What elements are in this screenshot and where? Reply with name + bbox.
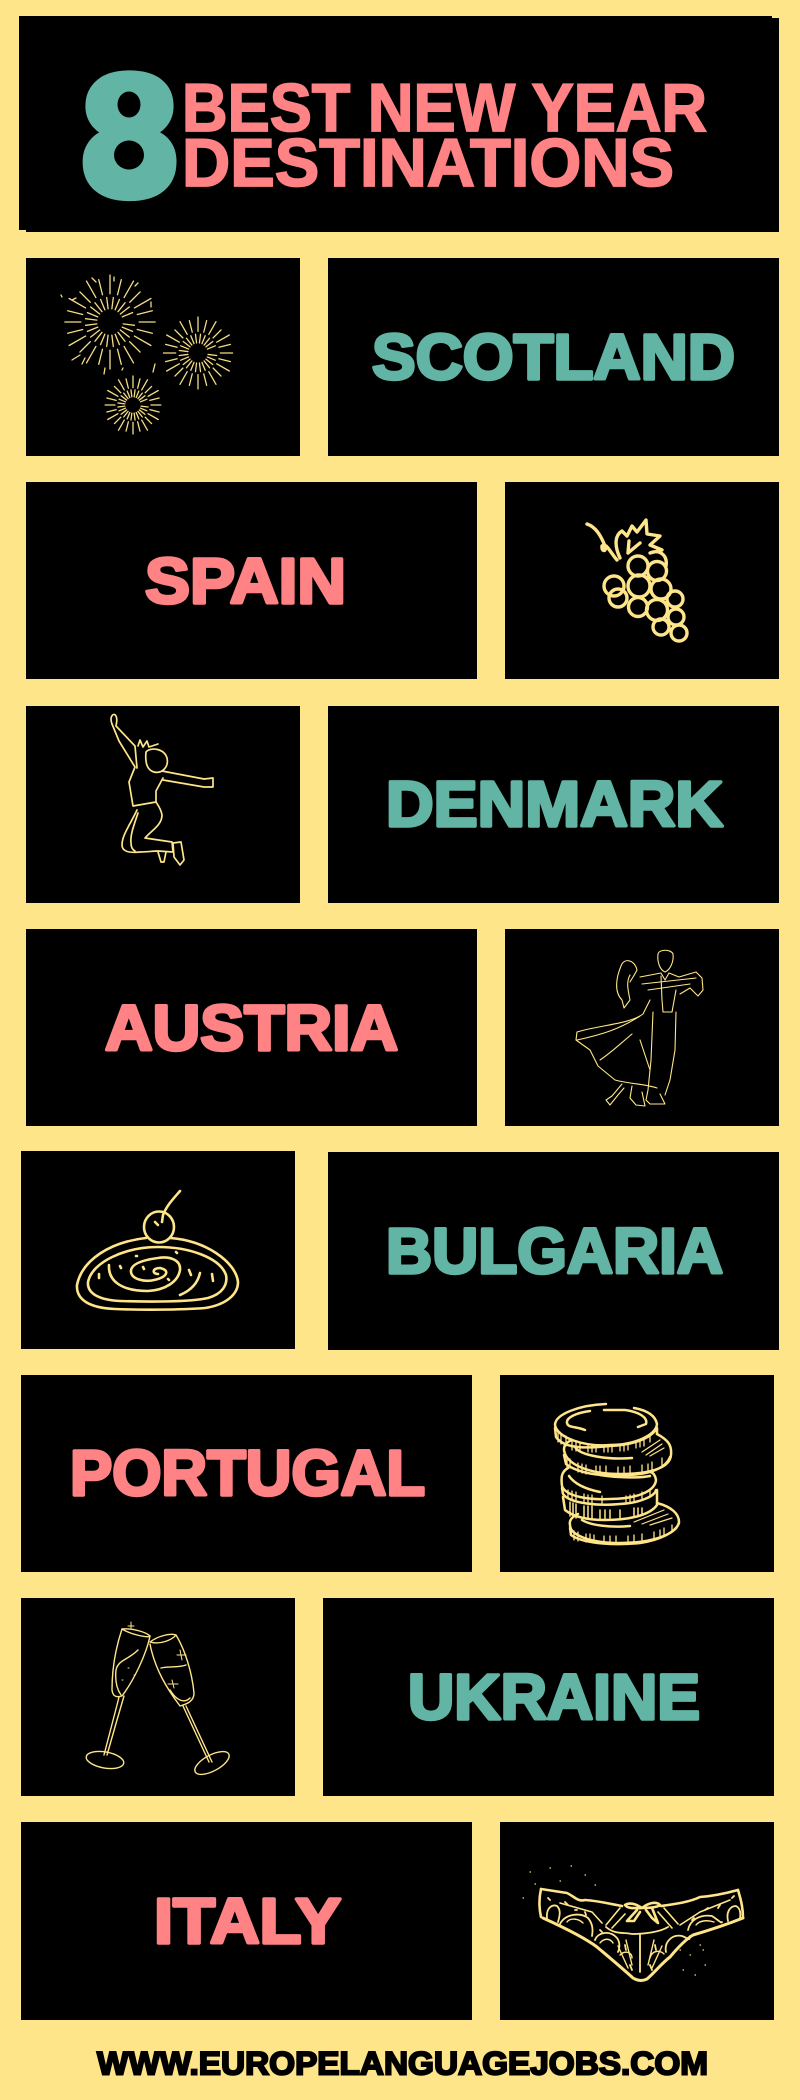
icon: coin stack xyxy=(555,1404,679,1544)
icon: clinking champagne flutes xyxy=(85,1622,233,1779)
panel: jumping person xyxy=(26,706,300,903)
icon: jumping person xyxy=(111,714,213,865)
icon: lace underwear xyxy=(523,1866,743,1980)
panel: champagne flutes xyxy=(21,1598,295,1796)
label: Bulgaria: BULGARIA xyxy=(386,1215,723,1287)
panel: dancers xyxy=(505,929,779,1126)
panel: Austria xyxy=(26,929,477,1126)
panel: fireworks xyxy=(26,258,300,456)
label: Italy: ITALY xyxy=(154,1885,341,1957)
panel: Scotland xyxy=(328,258,779,456)
label: Spain: SPAIN xyxy=(145,545,346,617)
label: Ukraine: UKRAINE xyxy=(408,1661,700,1733)
label: Denmark: DENMARK xyxy=(386,768,723,840)
counters of the 8 xyxy=(114,92,144,170)
panel: Spain xyxy=(26,482,477,679)
panel: coins xyxy=(500,1375,774,1572)
icon: grapes xyxy=(587,520,687,641)
panel: cake roll xyxy=(21,1151,295,1349)
label: Austria: AUSTRIA xyxy=(105,992,398,1064)
big number 8: 8 xyxy=(82,40,177,232)
icon: waltzing couple xyxy=(576,950,703,1106)
label: Scotland: SCOTLAND xyxy=(372,321,735,393)
icon: fireworks xyxy=(61,275,233,434)
panel: Ukraine xyxy=(323,1598,774,1796)
footer website URL: WWW.EUROPELANGUAGEJOBS.COM xyxy=(97,2046,708,2082)
title line 1: BEST NEW YEAR xyxy=(182,70,707,146)
panel: Denmark xyxy=(328,706,779,903)
title line 2: DESTINATIONS xyxy=(182,125,674,201)
panel: Italy xyxy=(21,1822,472,2020)
panel: lace underwear xyxy=(500,1822,774,2020)
icon: cake roll with cherry xyxy=(77,1191,238,1310)
body fill of the 8 xyxy=(100,80,160,184)
panel: Portugal xyxy=(21,1375,472,1572)
label: Portugal: PORTUGAL xyxy=(70,1437,425,1509)
panel: header xyxy=(19,16,779,232)
panel: Bulgaria xyxy=(328,1152,779,1350)
panel: grapes xyxy=(505,482,779,679)
